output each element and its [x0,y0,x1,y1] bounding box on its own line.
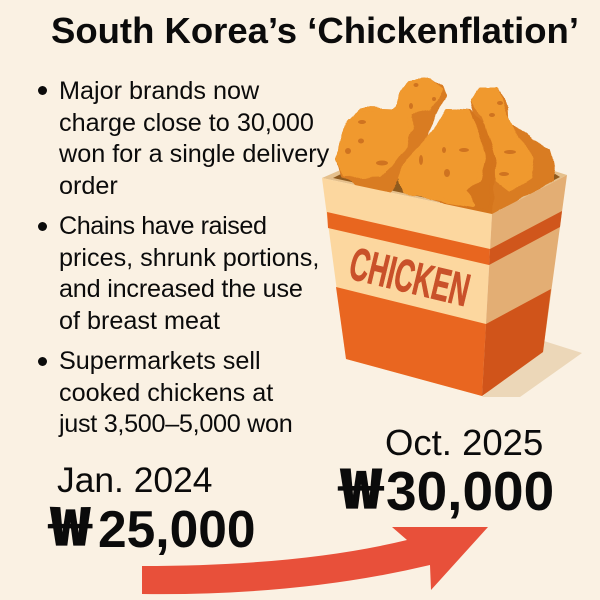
price: 30,000 won: ₩ [340,445,382,524]
price: 25,000 won: ₩ [50,485,91,560]
bullet: supermarkets [38,347,292,438]
price: 25,000 won: 25,000 [98,500,256,558]
bullet: portions: of breast meat [59,306,220,334]
bullet: supermarkets: cooked chickens at [59,378,273,406]
bullet: delivery price [38,77,330,200]
bullet: portions: Chains have raised [59,212,267,240]
chicken crumbs [345,83,516,177]
bullet list [38,77,330,438]
bullet: supermarkets: Supermarkets sell [59,347,261,375]
thigh center [400,110,493,214]
box front panel [322,178,492,396]
bullet: supermarkets: just 3,500–5,000 won [59,410,292,438]
label: Oct. 2025: Oct. 2025 [385,422,543,463]
orange lower part [336,287,551,396]
fried chicken pieces [337,80,553,214]
box label: CHICKEN [345,238,475,316]
bullet: delivery price: Major brands now [59,77,259,105]
title: South Korea’s ‘Chickenflation’ [51,10,579,51]
label: Jan. 2024: Jan. 2024 [57,460,212,500]
bullet: delivery price: order [59,172,118,200]
bullet: portions: prices, shrunk portions, [59,244,319,272]
bullet: portions [38,212,319,334]
price: 25,000 won [48,485,256,560]
drumstick left [337,80,445,192]
price: 30,000 won [338,445,554,524]
orange band [327,211,562,265]
drumstick right [473,90,553,214]
box side panel [482,175,567,396]
bullet: portions: and increased the use [59,275,303,303]
bullet: delivery price: won for a single delivery [59,140,329,168]
bullet: delivery price: charge close to 30,000 [59,108,314,136]
price: 30,000 won: 30,000 [386,460,554,522]
